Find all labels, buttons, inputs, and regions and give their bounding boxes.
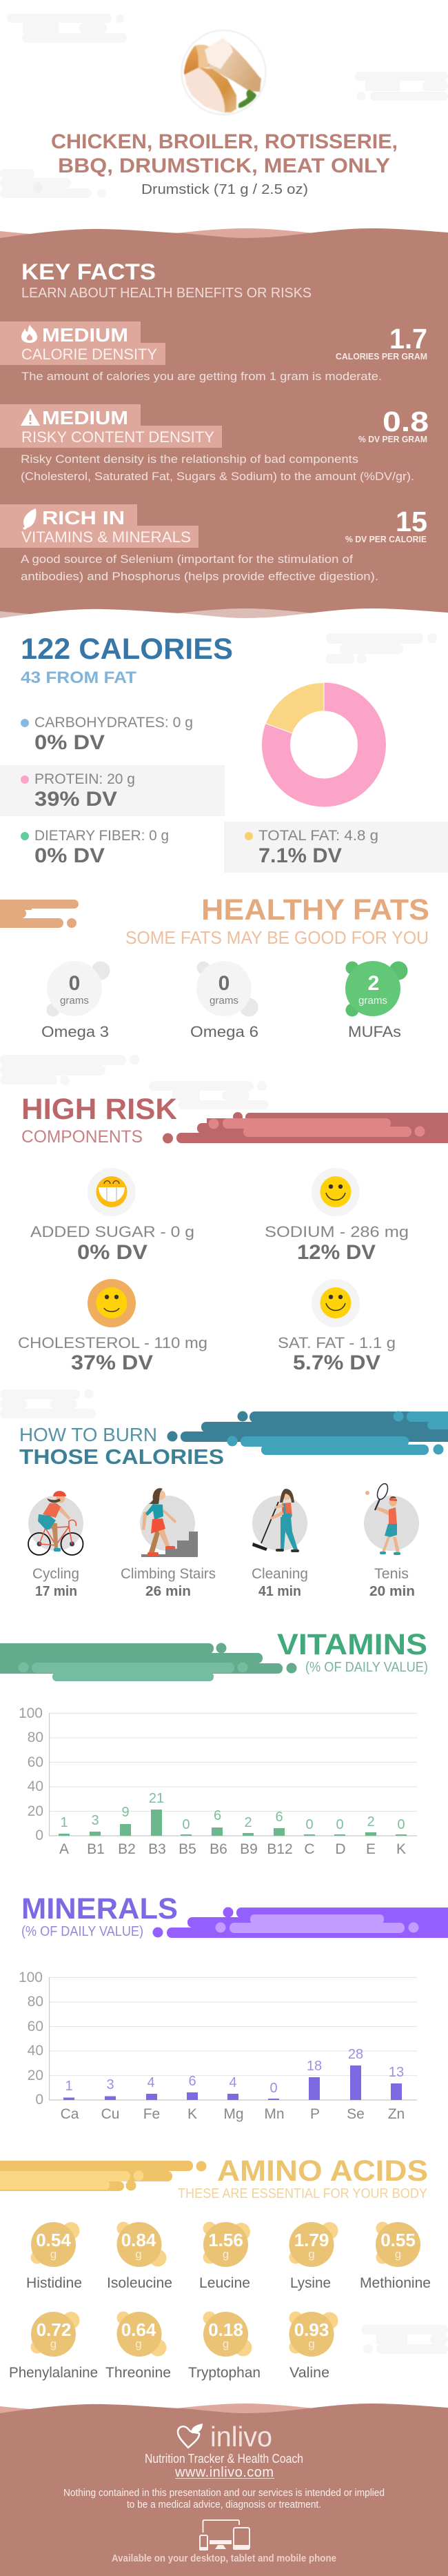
item: omega 6: Omega 6 bbox=[190, 1023, 258, 1040]
amino: valine: 0.93 bbox=[294, 2319, 329, 2340]
bar chart: minerals: 40 bbox=[28, 2043, 43, 2059]
stat label: % DV PER GRAM bbox=[358, 434, 427, 444]
item: mufas: MUFAs bbox=[348, 1023, 401, 1040]
disclaimer bbox=[63, 2487, 385, 2510]
amino: leucine: g bbox=[223, 2248, 229, 2261]
bar chart: minerals: 18 bbox=[307, 2059, 322, 2074]
stat: 1.7: 1.7 bbox=[389, 323, 427, 355]
bar chart: vitamins: 0 bbox=[336, 1817, 344, 1832]
bar chart: minerals: Se bbox=[347, 2106, 365, 2122]
bar chart: vitamins: 9 bbox=[121, 1805, 130, 1820]
item: omega 3: Omega 3 bbox=[41, 1023, 109, 1040]
amino: methionine: 0.55 bbox=[380, 2230, 416, 2250]
amino: threonine: g bbox=[135, 2337, 142, 2350]
amino: phenylalanine: 0.72 bbox=[37, 2319, 71, 2340]
description: The amount of calories you are getting from 1 gram is moderate. bbox=[21, 370, 382, 383]
panel: healthy fats bbox=[0, 893, 429, 1040]
bar chart: vitamins: 0 bbox=[182, 1817, 190, 1832]
bar chart: minerals: 1 bbox=[65, 2079, 73, 2094]
nutrient: dietary fiber bbox=[21, 828, 169, 867]
bar chart: minerals: 3 bbox=[106, 2077, 114, 2092]
disclaimer: Nothing contained in this presentation and our services is intended or implied bbox=[63, 2487, 385, 2499]
item: omega 6: 0 bbox=[218, 972, 230, 995]
amino: lysine bbox=[289, 2222, 338, 2291]
description: antibodies) and Phosphorus (helps provide effective digestion). bbox=[21, 570, 378, 583]
item: saturated fat bbox=[278, 1279, 396, 1374]
bar chart: vitamins: 2 bbox=[367, 1814, 375, 1830]
stat label: CALORIES PER GRAM bbox=[336, 351, 427, 361]
panel: vitamins bbox=[0, 1628, 428, 1857]
icon: smiling face bbox=[320, 1176, 352, 1207]
panel: high risk components bbox=[18, 1093, 448, 1374]
item: cholesterol: CHOLESTEROL - 110 mg bbox=[18, 1334, 207, 1351]
icon: inlivo heart logo bbox=[178, 2424, 203, 2448]
heading: VITAMINS bbox=[277, 1628, 427, 1661]
bar chart: vitamins: 2 bbox=[244, 1815, 252, 1830]
item: saturated fat: SAT. FAT - 1.1 g bbox=[278, 1334, 396, 1351]
description: Risky Content density is the relationship of bad components bbox=[21, 453, 358, 466]
panel: minerals bbox=[19, 1892, 448, 2122]
nutrient: carbohydrates: CARBOHYDRATES: 0 g bbox=[34, 715, 193, 731]
bar chart: minerals: Zn bbox=[388, 2106, 405, 2122]
label: risky content density: RISKY CONTENT DENSITY bbox=[21, 428, 214, 446]
icon: flame bbox=[21, 325, 37, 343]
fact: risky content density bbox=[0, 404, 429, 483]
amino: phenylalanine bbox=[9, 2312, 98, 2381]
label: medium: MEDIUM bbox=[42, 324, 128, 346]
bar chart: vitamins: 100 bbox=[19, 1705, 43, 1721]
bar chart: vitamins: 0 bbox=[35, 1827, 43, 1843]
bar chart: vitamins: B12 bbox=[267, 1841, 293, 1857]
amino: phenylalanine: Phenylalanine bbox=[9, 2365, 98, 2381]
bar chart: minerals: Ca bbox=[61, 2106, 79, 2122]
amino: tryptophan: Tryptophan bbox=[188, 2365, 261, 2381]
icon: smiling face bbox=[96, 1287, 127, 1318]
stat: 15: 15 bbox=[396, 506, 427, 537]
bar chart: vitamins: B1 bbox=[87, 1841, 105, 1857]
panel: calories bbox=[0, 633, 448, 873]
subheading: (% OF DAILY VALUE) bbox=[21, 1924, 143, 1939]
item: omega 6: grams bbox=[210, 995, 238, 1007]
logo wordmark: inlivo bbox=[210, 2421, 272, 2453]
bar chart: vitamins: A bbox=[59, 1841, 69, 1857]
bar chart: vitamins: B6 bbox=[210, 1841, 227, 1857]
bar chart: vitamins: D bbox=[335, 1841, 346, 1857]
amino: valine: Valine bbox=[289, 2365, 329, 2381]
stat: 0.8: 0.8 bbox=[383, 406, 429, 437]
amino: methionine bbox=[360, 2221, 431, 2291]
bar chart: minerals: K bbox=[187, 2106, 197, 2122]
bar chart: minerals: 20 bbox=[28, 2068, 43, 2083]
label: calorie density: CALORIE DENSITY bbox=[21, 346, 157, 363]
nutrient: carbohydrates: 0% DV bbox=[34, 731, 105, 754]
item: omega 3: 0 bbox=[69, 972, 80, 995]
heading: key facts: KEY FACTS bbox=[21, 259, 156, 284]
bar chart: vitamins: 6 bbox=[275, 1810, 283, 1825]
panel: footer bbox=[0, 2404, 448, 2576]
icon: chicken photo bbox=[182, 30, 266, 115]
title bbox=[51, 130, 398, 177]
nutrient: protein bbox=[0, 765, 225, 816]
description bbox=[21, 453, 414, 483]
amino: threonine: 0.64 bbox=[121, 2319, 156, 2340]
item: mufas: grams bbox=[358, 995, 387, 1007]
amino: tryptophan: g bbox=[223, 2337, 229, 2350]
banner shape bbox=[0, 900, 79, 928]
label: Cycling bbox=[32, 1566, 79, 1582]
bar chart: vitamins: 40 bbox=[28, 1779, 43, 1794]
bar chart: minerals: 80 bbox=[28, 1994, 43, 2010]
nutrient: total fat: 7.1% DV bbox=[258, 844, 342, 867]
amino: tryptophan: 0.18 bbox=[208, 2319, 243, 2340]
amino: histidine: 0.54 bbox=[36, 2230, 71, 2250]
bar chart: minerals: 4 bbox=[229, 2075, 237, 2090]
nutrient: total fat bbox=[224, 822, 448, 873]
item: omega 3: grams bbox=[60, 995, 89, 1007]
banner shape bbox=[153, 1907, 448, 1938]
bar chart: vitamins: B5 bbox=[179, 1841, 196, 1857]
amino: valine: g bbox=[308, 2337, 315, 2350]
bar chart: vitamins: 3 bbox=[91, 1813, 99, 1828]
label: medium: MEDIUM bbox=[42, 407, 128, 428]
bar chart: minerals bbox=[19, 1970, 417, 2122]
label: Climbing Stairs bbox=[121, 1566, 216, 1582]
banner shape bbox=[167, 1411, 448, 1455]
bar chart: minerals: 13 bbox=[389, 2065, 404, 2080]
item: mufas: 2 bbox=[368, 972, 379, 995]
amino: histidine: g bbox=[50, 2248, 57, 2261]
description bbox=[21, 553, 378, 583]
disclaimer: to be a medical advice, diagnosis or treatment. bbox=[127, 2499, 321, 2510]
bar chart: vitamins: 20 bbox=[28, 1803, 43, 1819]
amino: histidine bbox=[26, 2222, 82, 2291]
item: added sugar: ADDED SUGAR - 0 g bbox=[30, 1223, 194, 1240]
item: sodium: 12% DV bbox=[297, 1241, 376, 1264]
description: A good source of Selenium (important for the stimulation of bbox=[21, 553, 353, 566]
item: saturated fat: 5.7% DV bbox=[293, 1351, 380, 1374]
nutrient: protein: PROTEIN: 20 g bbox=[34, 771, 135, 787]
heading: HIGH RISK bbox=[21, 1093, 177, 1126]
bar chart: vitamins: C bbox=[304, 1841, 315, 1857]
availability note: Available on your desktop, tablet and mobile phone bbox=[112, 2553, 336, 2564]
duration: 20 min bbox=[369, 1584, 415, 1599]
activity: cycling bbox=[28, 1491, 83, 1599]
subheading: from fat: 43 FROM FAT bbox=[21, 668, 136, 687]
bar chart: minerals: Mg bbox=[223, 2106, 244, 2122]
panel: key facts bbox=[0, 228, 448, 621]
duration: 26 min bbox=[145, 1584, 191, 1599]
serving size: Drumstick (71 g / 2.5 oz) bbox=[141, 182, 308, 197]
nutrient: dietary fiber: 0% DV bbox=[34, 844, 105, 867]
amino: isoleucine: g bbox=[135, 2248, 142, 2261]
subheading: COMPONENTS bbox=[21, 1127, 143, 1147]
donut chart bbox=[265, 683, 372, 793]
amino: histidine: Histidine bbox=[26, 2275, 82, 2291]
fact: rich in vitamins and minerals bbox=[0, 504, 427, 583]
heading: MINERALS bbox=[21, 1892, 178, 1925]
title: BBQ, DRUMSTICK, MEAT ONLY bbox=[58, 155, 390, 177]
bar chart: vitamins: 1 bbox=[60, 1815, 68, 1830]
amino: isoleucine: 0.84 bbox=[121, 2230, 156, 2250]
heading line 1: HOW TO BURN bbox=[19, 1424, 157, 1445]
amino: threonine: Threonine bbox=[105, 2365, 171, 2381]
heading: 122 calories: 122 CALORIES bbox=[21, 633, 233, 666]
activity: cleaning bbox=[252, 1489, 308, 1599]
heading: AMINO ACIDS bbox=[217, 2154, 428, 2188]
amino: tryptophan bbox=[188, 2311, 261, 2381]
bar chart: vitamins: 0 bbox=[397, 1817, 405, 1832]
bar chart: minerals: 0 bbox=[269, 2081, 278, 2096]
nutrient: protein: 39% DV bbox=[34, 788, 117, 811]
item: cholesterol: 37% DV bbox=[71, 1351, 153, 1374]
bar chart: minerals: Mn bbox=[264, 2106, 285, 2122]
subheading: (% OF DAILY VALUE) bbox=[305, 1660, 428, 1675]
item: sodium: SODIUM - 286 mg bbox=[265, 1223, 409, 1240]
activity: tennis bbox=[364, 1482, 419, 1599]
icon: grinning face bbox=[96, 1176, 127, 1207]
amino: valine bbox=[289, 2311, 338, 2381]
heading: HEALTHY FATS bbox=[201, 893, 429, 927]
bar chart: minerals: Fe bbox=[143, 2106, 160, 2122]
description: (Cholesterol, Saturated Fat, Sugars & Sodium) to the amount (%DV/gr). bbox=[21, 470, 414, 483]
website link: www.inlivo.com bbox=[174, 2465, 274, 2480]
icon: stairs climber bbox=[141, 1488, 198, 1557]
subheading: LEARN ABOUT HEALTH BENEFITS OR RISKS bbox=[21, 286, 312, 301]
activity: climbing stairs bbox=[121, 1488, 216, 1599]
item: cholesterol bbox=[18, 1279, 207, 1374]
bar chart: vitamins: B3 bbox=[148, 1841, 166, 1857]
label: Cleaning bbox=[252, 1566, 308, 1582]
duration: 41 min bbox=[258, 1584, 301, 1599]
amino: leucine: 1.56 bbox=[208, 2230, 243, 2250]
banner shape bbox=[0, 1643, 296, 1681]
banner shape bbox=[0, 2161, 207, 2191]
amino: isoleucine: Isoleucine bbox=[107, 2275, 172, 2291]
bar chart: minerals: 4 bbox=[147, 2075, 155, 2090]
bar chart: minerals: 60 bbox=[28, 2019, 43, 2034]
label: rich in: RICH IN bbox=[42, 507, 125, 528]
panel: amino acids bbox=[0, 2154, 431, 2381]
item: omega 3 bbox=[41, 961, 110, 1040]
item: omega 6 bbox=[190, 961, 258, 1040]
icon: cyclist bbox=[28, 1491, 83, 1555]
bar chart: vitamins: 6 bbox=[214, 1808, 221, 1823]
amino: lysine: g bbox=[308, 2248, 315, 2261]
subheading: THESE ARE ESSENTIAL FOR YOUR BODY bbox=[178, 2186, 427, 2201]
bar chart: vitamins: B9 bbox=[240, 1841, 258, 1857]
bar chart: vitamins: E bbox=[366, 1841, 376, 1857]
amino: leucine: Leucine bbox=[199, 2275, 250, 2291]
item: added sugar: 0% DV bbox=[77, 1241, 147, 1264]
icon: leaf bbox=[23, 508, 36, 530]
amino: leucine bbox=[199, 2221, 250, 2291]
fact: calorie density bbox=[0, 321, 427, 383]
bar chart: vitamins: 60 bbox=[28, 1754, 43, 1770]
bar chart: vitamins: 21 bbox=[149, 1791, 164, 1806]
icon: tennis player bbox=[365, 1482, 400, 1555]
nutrient: total fat: TOTAL FAT: 4.8 g bbox=[258, 828, 378, 844]
duration: 17 min bbox=[35, 1584, 77, 1599]
bar chart: vitamins bbox=[19, 1705, 417, 1857]
bar chart: vitamins: 80 bbox=[28, 1730, 43, 1745]
amino: isoleucine bbox=[107, 2221, 172, 2291]
item: mufas bbox=[345, 961, 408, 1040]
amino: methionine: Methionine bbox=[360, 2275, 431, 2291]
bar chart: minerals: Cu bbox=[101, 2106, 119, 2122]
bar chart: minerals: 100 bbox=[19, 1970, 43, 1985]
bar chart: minerals: 0 bbox=[35, 2092, 43, 2108]
icon: smiling face bbox=[320, 1287, 352, 1318]
bar chart: minerals: P bbox=[310, 2106, 320, 2122]
nutrient: dietary fiber: DIETARY FIBER: 0 g bbox=[34, 828, 169, 844]
panel: how to burn calories bbox=[19, 1411, 448, 1599]
icon: person sweeping bbox=[252, 1489, 299, 1552]
bar chart: vitamins: 0 bbox=[305, 1817, 314, 1832]
nutrient: carbohydrates bbox=[21, 715, 193, 754]
amino: threonine bbox=[105, 2311, 171, 2381]
item: added sugar bbox=[30, 1168, 194, 1264]
stat label: % DV PER CALORIE bbox=[345, 534, 427, 544]
bar chart: minerals: 28 bbox=[348, 2047, 363, 2062]
amino: methionine: g bbox=[395, 2248, 401, 2261]
bar chart: vitamins: B2 bbox=[118, 1841, 136, 1857]
subheading: SOME FATS MAY BE GOOD FOR YOU bbox=[125, 927, 429, 948]
item: sodium bbox=[265, 1168, 409, 1264]
title: CHICKEN, BROILER, ROTISSERIE, bbox=[51, 130, 398, 153]
amino: phenylalanine: g bbox=[50, 2337, 57, 2350]
label: vitamins and minerals: VITAMINS & MINERALS bbox=[21, 528, 191, 546]
label: Tenis bbox=[374, 1566, 409, 1582]
icon: devices bbox=[199, 2520, 250, 2550]
amino: lysine: Lysine bbox=[290, 2275, 331, 2291]
banner shape bbox=[163, 1112, 448, 1144]
icon: warning bbox=[21, 408, 40, 426]
bar chart: minerals: 6 bbox=[188, 2074, 196, 2089]
tagline: Nutrition Tracker & Health Coach bbox=[145, 2452, 303, 2466]
heading line 2: THOSE CALORIES bbox=[19, 1445, 224, 1469]
bar chart: vitamins: K bbox=[396, 1841, 406, 1857]
amino: lysine: 1.79 bbox=[294, 2230, 329, 2250]
